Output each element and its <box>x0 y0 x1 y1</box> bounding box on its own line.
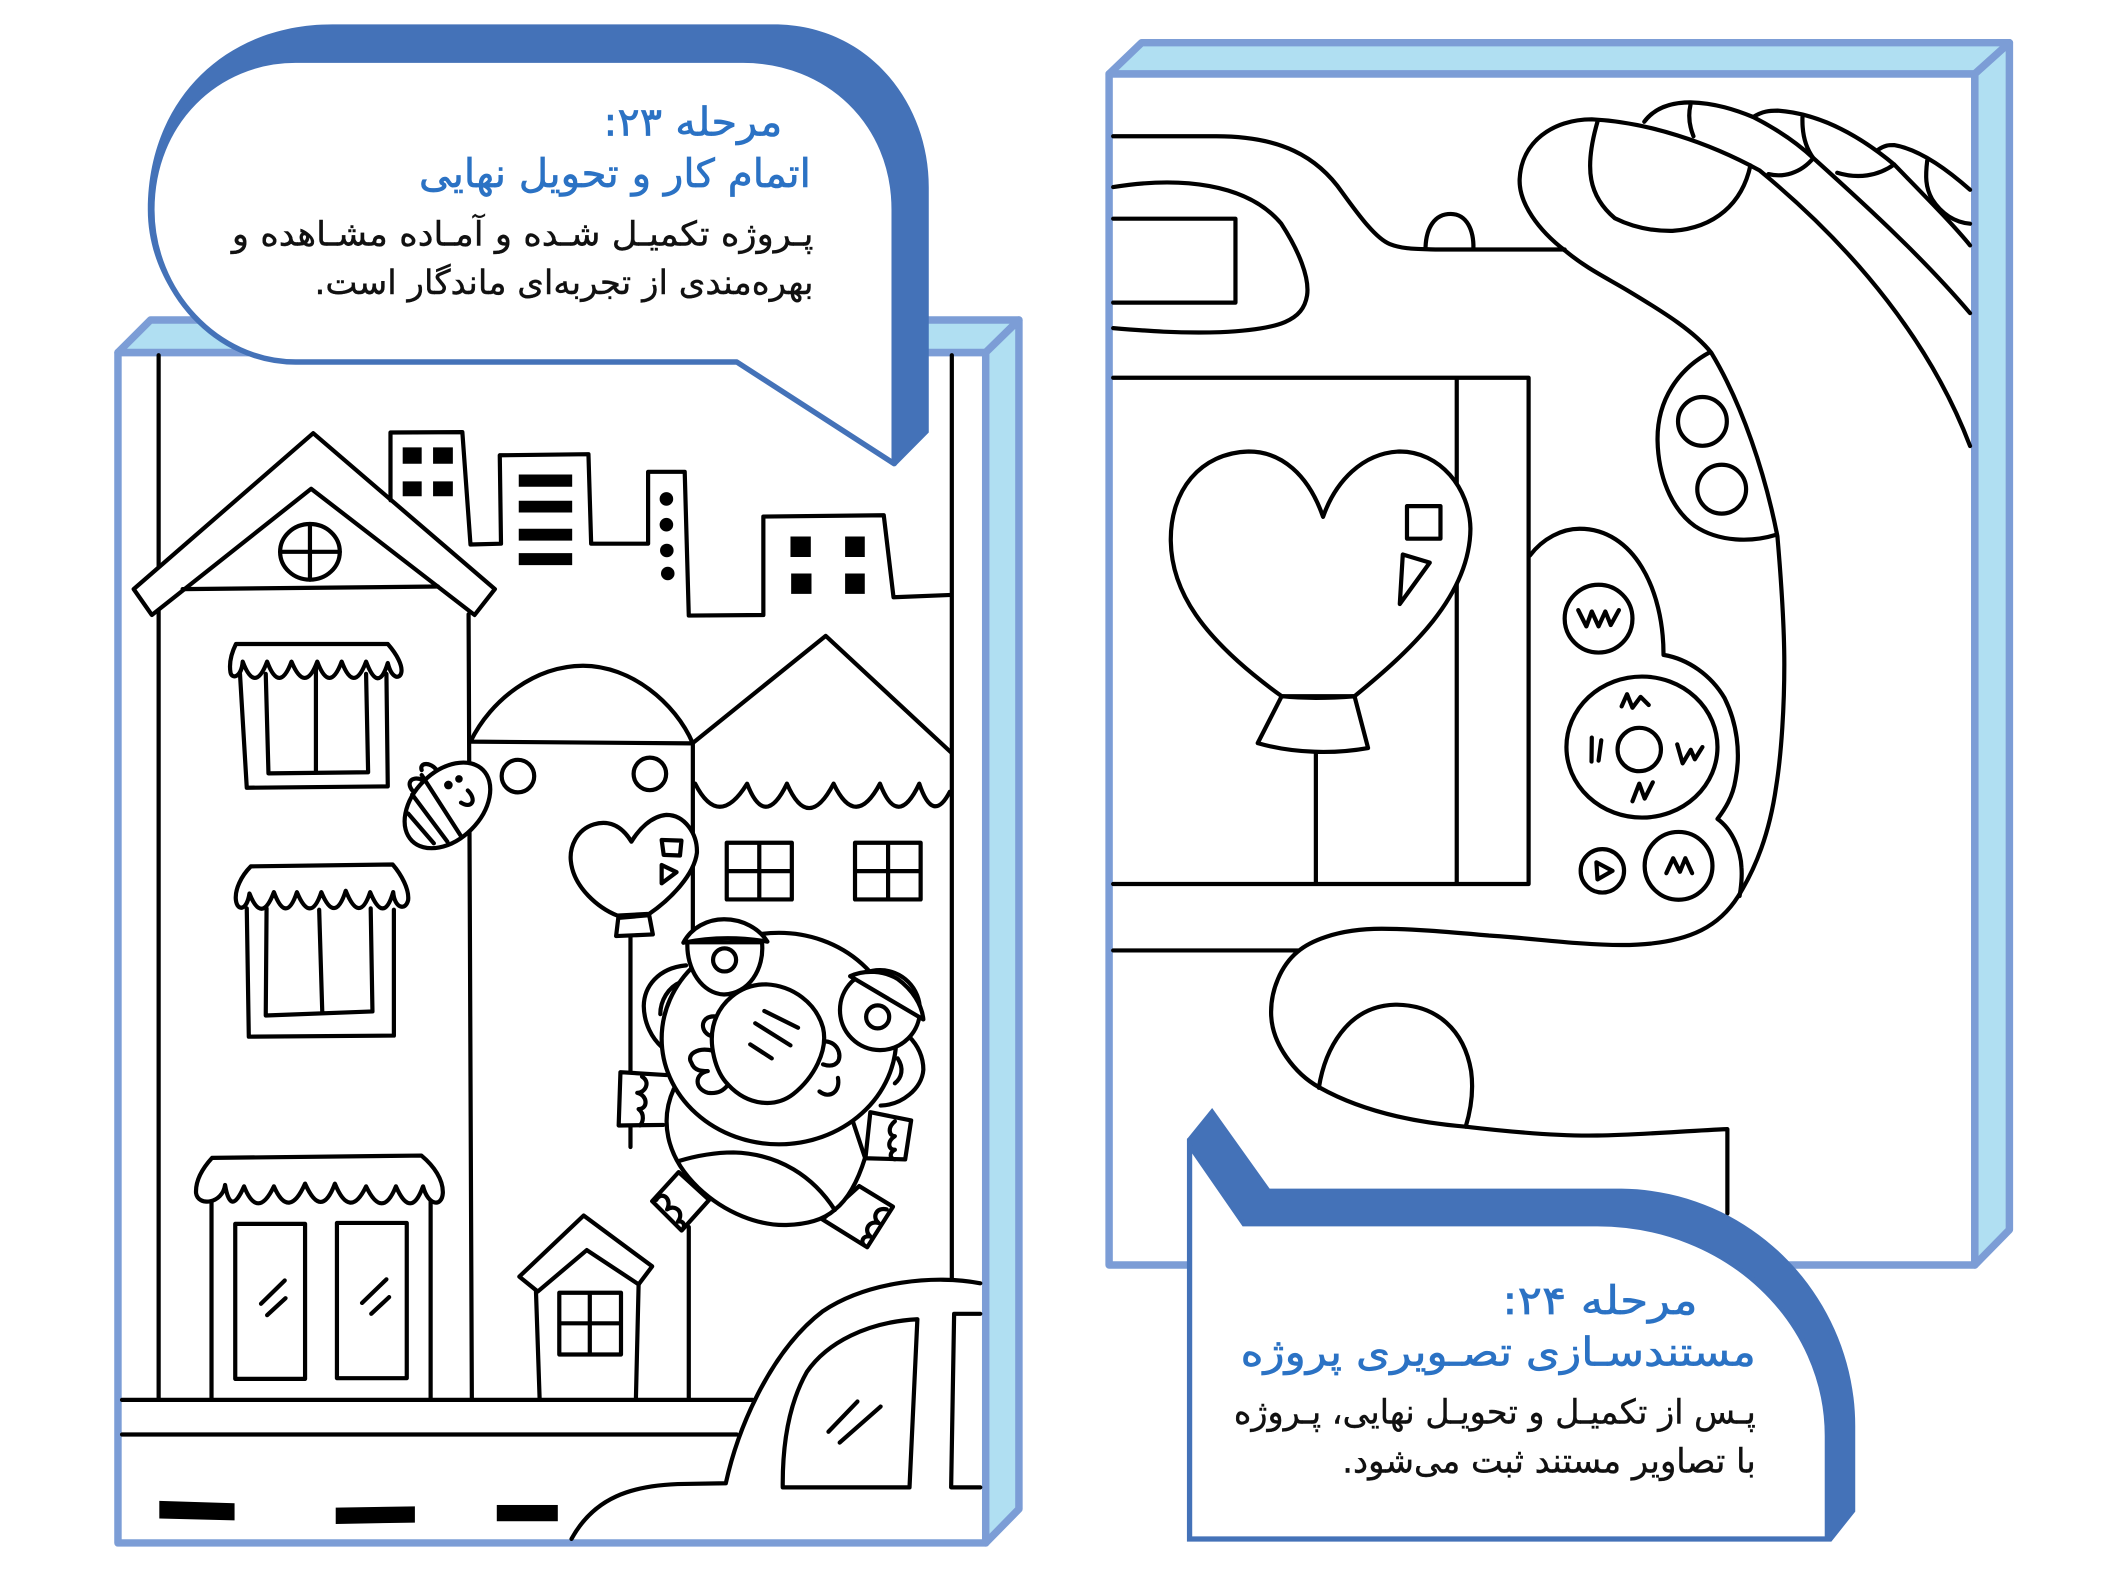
callout: step 24 <box>1187 1108 1855 1542</box>
control area outline <box>1530 529 1742 896</box>
ears <box>644 965 923 1106</box>
body text line 2: بهره‌مندی از تجربه‌ای ماندگار است. <box>315 263 814 303</box>
left foot <box>652 1172 709 1231</box>
button: play <box>1581 849 1624 893</box>
heading: step 23: مرحله ۲۳: <box>603 101 782 146</box>
body text line 2: با تصاویر مستند ثبت می‌شود. <box>1342 1441 1756 1481</box>
body text line 1: پـروژه تکمیـل شـده و آمـاده مشـاهده و <box>230 213 814 254</box>
callout: step 23 <box>148 24 929 466</box>
right hand <box>865 1112 911 1159</box>
character floating with balloon <box>619 919 923 1247</box>
grip buttons <box>1658 352 1776 540</box>
camera screen <box>1113 378 1529 884</box>
eye right <box>840 970 923 1050</box>
heading: visual documentation: مستندسـازی تصـویری پروژه <box>1241 1330 1756 1375</box>
car <box>571 1280 982 1539</box>
callout shape 23 <box>148 24 929 466</box>
awning storefront <box>196 1156 443 1399</box>
tall house with roof <box>134 355 495 1399</box>
heart balloon on screen <box>1171 451 1470 752</box>
right house with windows <box>693 636 951 899</box>
awning window 2 <box>236 864 408 1037</box>
icon: bee <box>388 746 507 865</box>
callout shape 24 <box>1187 1108 1855 1542</box>
shutter button <box>1426 214 1473 249</box>
eye left <box>683 919 767 995</box>
button: zigzag <box>1565 585 1632 653</box>
small heart balloon <box>571 815 697 1147</box>
viewfinder <box>1113 182 1307 333</box>
small house <box>519 1216 652 1399</box>
left hand <box>619 1072 666 1125</box>
skyline buildings <box>390 355 952 1280</box>
hand and fingers <box>1271 102 1970 1213</box>
button: m <box>1645 832 1712 900</box>
domed building <box>470 666 693 1399</box>
panel frame: right box <box>1109 43 2009 1265</box>
heading: finish and delivery: اتمام کار و تحویل نهایی <box>419 152 811 197</box>
street lines and dashes <box>122 1400 753 1524</box>
panel: step 23 city illustration <box>118 320 1019 1543</box>
camera top outline <box>1113 136 1565 249</box>
panel: step 24 camera illustration <box>1109 43 2009 1265</box>
body text line 1: پـس از تکمیـل و تحویـل نهایی، پـروژه <box>1234 1393 1756 1433</box>
panel frame: left box <box>118 320 1019 1543</box>
camera lower line and finger <box>1113 950 1472 1127</box>
cheek and mouth scallops <box>690 1016 839 1095</box>
snout <box>712 984 824 1103</box>
right foot <box>822 1186 893 1247</box>
awning window 1 <box>230 644 402 788</box>
body <box>667 1085 865 1225</box>
head <box>662 933 896 1144</box>
heading: step 24: مرحله ۲۴: <box>1502 1279 1698 1324</box>
d-pad <box>1566 677 1717 818</box>
